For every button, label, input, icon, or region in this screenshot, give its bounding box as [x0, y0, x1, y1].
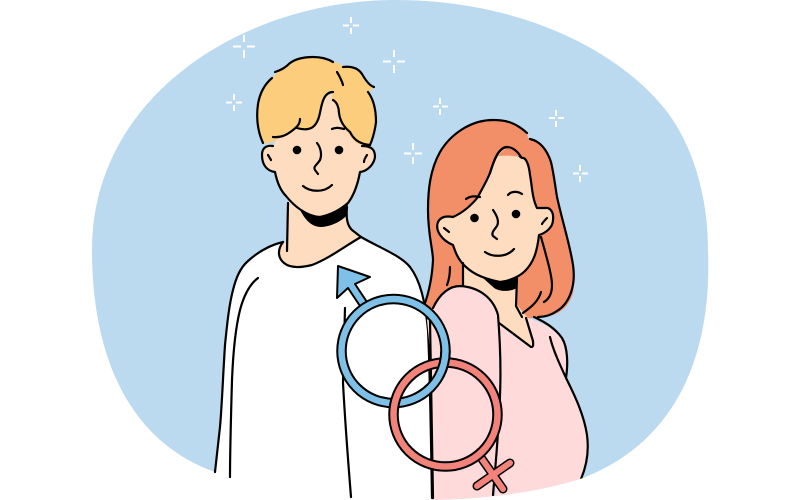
man facial lines: [268, 128, 367, 191]
man eyes: [293, 146, 343, 154]
woman neck: [463, 262, 535, 347]
woman eyes: [470, 210, 520, 222]
female symbol: [394, 362, 510, 489]
man ears and jaw outline: [262, 146, 375, 217]
woman face: [437, 147, 553, 282]
sparkles: [226, 17, 588, 182]
man hair: [257, 57, 375, 146]
woman facial lines: [444, 192, 552, 313]
woman: [422, 120, 589, 500]
woman hair back: [422, 120, 574, 330]
male symbol arrow: [337, 266, 370, 306]
woman body sweater: [495, 317, 589, 500]
woman shadow under chin: [483, 276, 518, 291]
woman raised arm: [427, 286, 501, 500]
male symbol: [337, 266, 446, 403]
woman hairline: [490, 147, 521, 173]
man shirt: [215, 237, 432, 500]
male symbol ring: [342, 299, 446, 403]
woman hair fringe tint: [498, 148, 522, 157]
man face: [262, 92, 375, 217]
interlocking overlap of male ring: [439, 351, 446, 375]
man hair outlines: [257, 57, 376, 145]
illustration: couple with gender symbols: [92, 0, 708, 500]
female symbol ring: [394, 362, 498, 466]
man: [215, 57, 432, 500]
female symbol stem and cross: [477, 459, 510, 489]
man shadow under chin: [299, 203, 348, 227]
man neck: [279, 195, 361, 267]
background blob: [92, 0, 708, 500]
